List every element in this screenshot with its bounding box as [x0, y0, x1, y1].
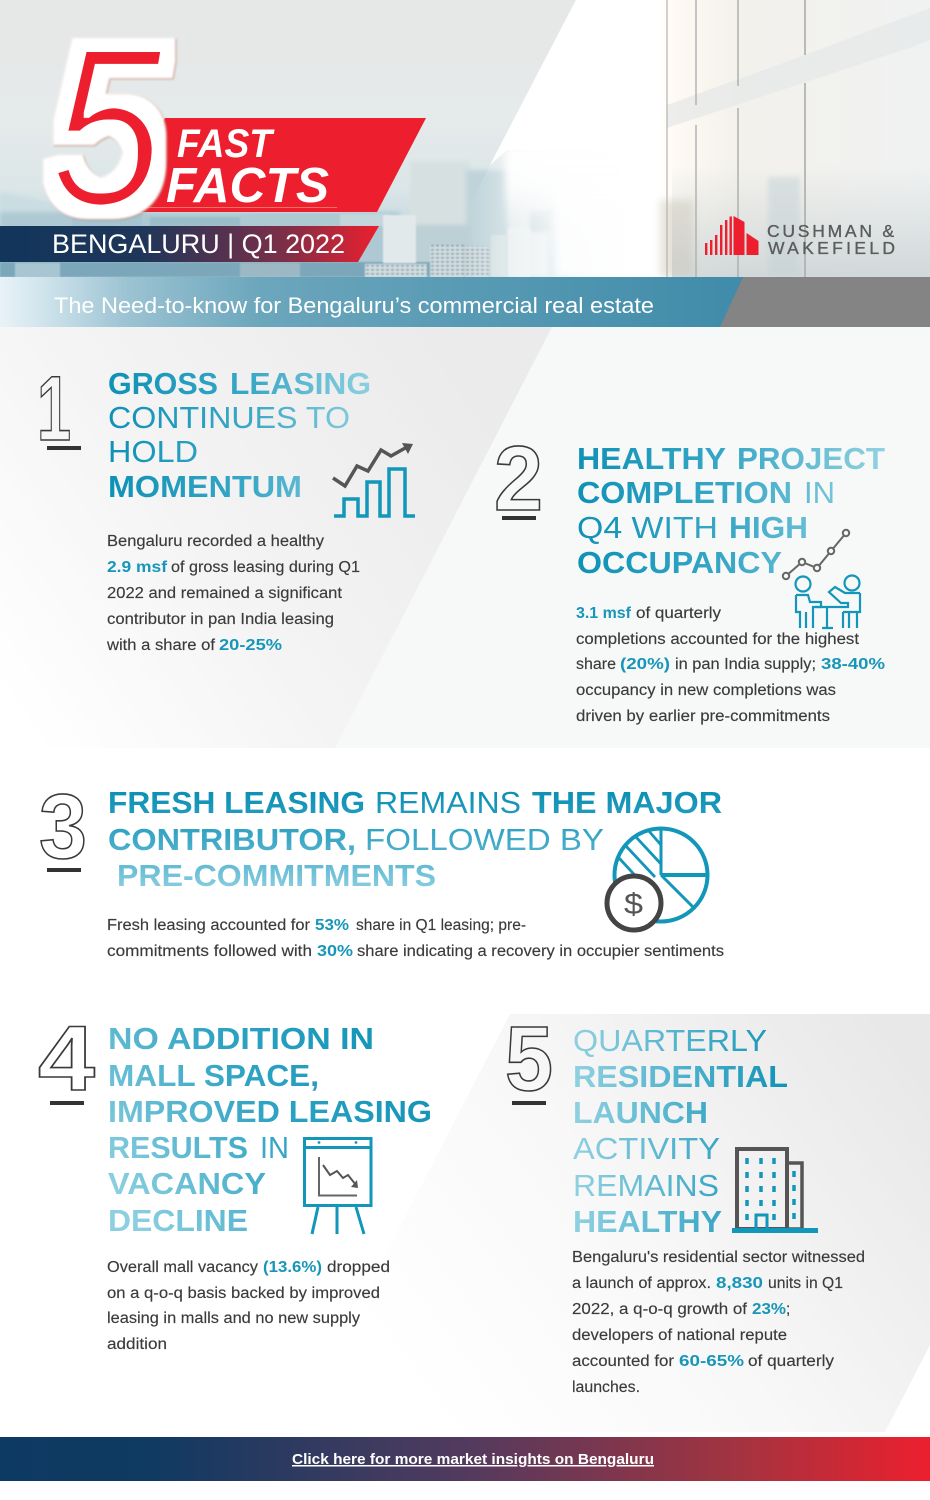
heading 2: Q4 WITH	[577, 510, 718, 545]
body 2: (20%)	[620, 656, 670, 673]
body 4: addition	[107, 1336, 167, 1353]
big numeral 5: 5	[50, 0, 164, 253]
heading 5	[573, 1023, 788, 1239]
numeral 5: 5	[505, 1008, 553, 1110]
FAST: FAST	[177, 122, 275, 166]
fact 1	[37, 358, 415, 654]
icon: presentation board with falling chart	[304, 1138, 371, 1234]
footer call-to-action bar: Click here for more market insights on Bengaluru	[292, 1451, 654, 1468]
body 3	[107, 917, 724, 960]
heading 2: COMPLETION	[577, 475, 792, 510]
body 2: completions accounted for the highest	[576, 631, 860, 648]
body 5: 8,830	[716, 1275, 763, 1292]
icon: line graph over meeting	[783, 530, 860, 628]
heading 2: HEALTHY	[577, 441, 726, 476]
header photo background	[0, 0, 930, 277]
body 3: 53%	[315, 917, 349, 934]
icon: apartment buildings	[732, 1149, 818, 1233]
body 3: 30%	[317, 943, 353, 960]
heading 4: MALL SPACE,	[108, 1058, 319, 1093]
city and quarter ribbon	[0, 226, 379, 262]
heading 5: QUARTERLY	[573, 1023, 767, 1058]
band text: The Need-to-know for Bengaluru’s commercial real estate	[54, 293, 654, 318]
heading 5: REMAINS	[573, 1168, 719, 1203]
logo: Cushman and Wakefield	[705, 216, 895, 258]
body 1: 2022 and remained a significant	[107, 585, 343, 602]
body 5: accounted for	[572, 1353, 674, 1370]
fact 4	[38, 1008, 432, 1353]
body 1: 20-25%	[219, 637, 282, 654]
body 5: of quarterly	[748, 1353, 834, 1370]
window	[658, 0, 930, 277]
body 2: share	[576, 656, 616, 673]
heading 3	[108, 785, 722, 893]
numeral 2: 2	[494, 428, 543, 530]
heading 2	[577, 441, 885, 580]
icon: pie chart with dollar coin: $	[624, 888, 643, 921]
title badge: 5 fast facts	[50, 0, 426, 253]
heading 2: OCCUPANCY	[577, 545, 782, 580]
body 2: occupancy in new completions was	[576, 682, 836, 699]
body 3: share indicating a recovery in occupier sentiments	[357, 943, 724, 960]
body 5	[572, 1249, 865, 1396]
heading 3: THE MAJOR	[532, 785, 722, 820]
heading 4: IN	[260, 1130, 289, 1165]
heading 4: IMPROVED LEASING	[108, 1094, 432, 1129]
heading 1	[108, 366, 371, 504]
body 5: launches.	[572, 1379, 640, 1396]
panel background: fact 5	[294, 1014, 930, 1432]
body 5: 23%	[752, 1301, 786, 1318]
body 3: share in Q1 leasing; pre-	[356, 917, 526, 934]
body 1: with a share of	[106, 637, 216, 654]
body 5: developers of national repute	[572, 1327, 787, 1344]
heading 5: LAUNCH	[573, 1095, 708, 1130]
body 4: leasing in malls and no new supply	[107, 1310, 360, 1327]
heading 4: VACANCY	[108, 1166, 266, 1201]
heading 1: GROSS	[108, 366, 218, 401]
heading 4	[108, 1021, 432, 1238]
logo: Cushman and Wakefield: WAKEFIELD	[768, 238, 895, 258]
body 1	[106, 533, 360, 654]
body 2: in pan India supply;	[675, 656, 816, 673]
body 1: contributor in pan India leasing	[107, 611, 334, 628]
heading 2: IN	[804, 475, 835, 510]
icon: pie chart with dollar coin	[607, 828, 708, 930]
heading 3: FOLLOWED BY	[365, 822, 604, 857]
body 5: units in Q1	[768, 1275, 843, 1292]
body 2: 3.1 msf	[576, 605, 632, 622]
heading 3: PRE-COMMITMENTS	[117, 858, 436, 893]
body 2: 38-40%	[821, 656, 885, 673]
body 1: Bengaluru recorded a healthy	[107, 533, 324, 550]
lead-in band: need to know	[0, 277, 930, 327]
body 2: driven by earlier pre-commitments	[576, 708, 830, 725]
heading 4: RESULTS	[108, 1130, 248, 1165]
body 5: a launch of approx.	[572, 1275, 711, 1292]
heading 1: CONTINUES TO	[108, 400, 350, 435]
body 5: Bengaluru's residential sector witnessed	[572, 1249, 865, 1266]
fact 2	[494, 428, 885, 725]
body 1: of gross leasing during Q1	[171, 559, 360, 576]
heading 3: FRESH LEASING	[108, 785, 365, 820]
icon: rising bar chart	[333, 443, 415, 516]
body 4: on a q-o-q basis backed by improved	[107, 1285, 380, 1302]
heading 4: DECLINE	[108, 1203, 248, 1238]
body 1: 2.9 msf	[107, 559, 168, 576]
numeral 3: 3	[39, 776, 87, 878]
heading 3: REMAINS	[375, 785, 521, 820]
body 3: commitments followed with	[107, 943, 312, 960]
FACTS: FACTS	[166, 159, 329, 213]
heading 2: HIGH	[729, 510, 808, 545]
body 5: 60-65%	[679, 1353, 744, 1370]
heading 5: HEALTHY	[573, 1204, 722, 1239]
heading 5: RESIDENTIAL	[573, 1059, 788, 1094]
fact 5	[505, 1008, 865, 1396]
fact 3	[39, 776, 724, 960]
body 4: Overall mall vacancy	[107, 1259, 258, 1276]
heading 1: LEASING	[230, 366, 371, 401]
city and quarter ribbon: BENGALURU | Q1 2022	[52, 229, 345, 259]
white diagonal glow	[470, 0, 665, 277]
body 5: ;	[786, 1301, 790, 1318]
skyline	[0, 162, 552, 277]
body 2: of quarterly	[636, 605, 721, 622]
logo: Cushman and Wakefield: CUSHMAN &	[767, 221, 894, 241]
body 5: 2022, a q-o-q growth of	[572, 1301, 748, 1318]
heading 1: HOLD	[108, 434, 198, 469]
body 4	[107, 1259, 390, 1353]
heading 1: MOMENTUM	[108, 469, 302, 504]
panel background: facts 1 and 2	[0, 327, 930, 748]
body 4: (13.6%)	[263, 1259, 322, 1276]
body 3: Fresh leasing accounted for	[107, 917, 310, 934]
heading 5: ACTIVITY	[573, 1131, 720, 1166]
heading 3: CONTRIBUTOR,	[108, 822, 356, 857]
numeral 1: 1	[37, 358, 71, 460]
body 2	[576, 605, 885, 725]
body 4: dropped	[327, 1259, 390, 1276]
footer call-to-action bar	[0, 1437, 930, 1481]
heading 4: NO ADDITION IN	[108, 1021, 374, 1056]
numeral 4: 4	[38, 1008, 95, 1110]
heading 2: PROJECT	[737, 441, 885, 476]
